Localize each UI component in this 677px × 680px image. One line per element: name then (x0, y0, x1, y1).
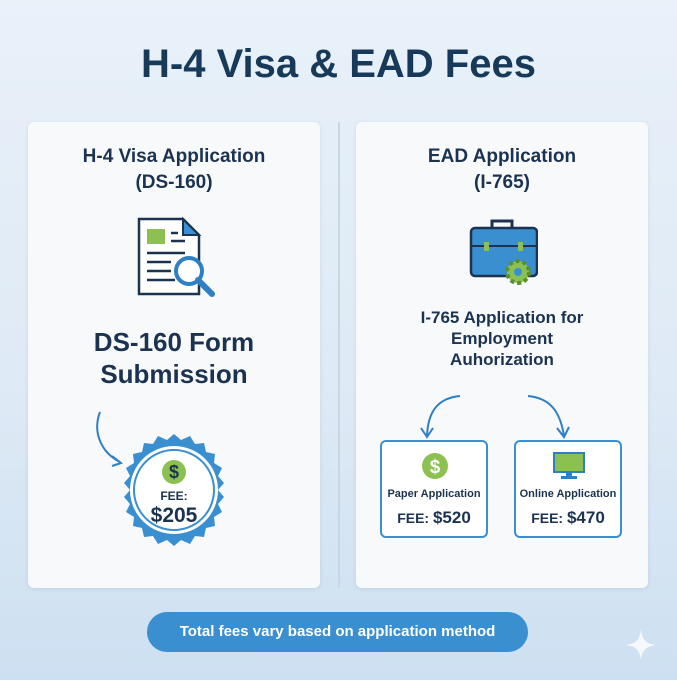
heading: DS-160 Form Submission: Submission (100, 359, 248, 389)
heading: DS-160 Form Submission (94, 327, 254, 389)
arrow: left (420, 395, 460, 439)
badge: fee $205: FEE: (160, 489, 188, 503)
arrow: right (528, 395, 570, 439)
heading: I-765 Application: Auhorization (450, 350, 554, 369)
box: paper application: FEE: $520 (397, 508, 471, 527)
panel: H-4 visa (28, 122, 320, 588)
heading: EAD Application: EAD Application (428, 146, 576, 167)
heading: H-4 Visa Application: H-4 Visa Application (83, 146, 265, 167)
heading: H-4 Visa Application: (DS-160) (135, 172, 213, 193)
icon: sparkle (626, 630, 656, 660)
arrow (96, 412, 123, 467)
icon: document with magnifier (138, 216, 215, 297)
footer pill: Total fees vary based on application method (180, 623, 495, 640)
icon: dollar (422, 453, 448, 479)
heading: I-765 Application: Employment (451, 329, 553, 348)
box: online application: FEE: $470 (531, 508, 605, 527)
box: paper application (380, 440, 488, 538)
box: online application (514, 440, 622, 538)
heading: I-765 Application (421, 308, 584, 369)
panel: EAD (356, 122, 648, 588)
icon: monitor (553, 452, 585, 479)
heading: I-765 Application: I-765 Application for (421, 308, 583, 327)
box: online application: Online Application (520, 488, 616, 500)
heading: H-4 Visa Application (83, 146, 265, 193)
badge: fee $205: $205 (151, 504, 198, 527)
badge: fee $205: $ (169, 462, 179, 482)
heading: EAD Application (428, 146, 576, 193)
title: H-4 Visa & EAD Fees (141, 42, 536, 86)
heading: DS-160 Form Submission: DS-160 Form (94, 327, 254, 357)
divider (338, 122, 340, 588)
box: paper application: Paper Application (387, 488, 481, 500)
icon: dollar: $ (430, 457, 441, 478)
badge: fee $205 (124, 434, 224, 546)
icon: briefcase with gear (470, 220, 538, 285)
heading: EAD Application: (I-765) (474, 172, 530, 193)
footer pill (147, 612, 528, 652)
